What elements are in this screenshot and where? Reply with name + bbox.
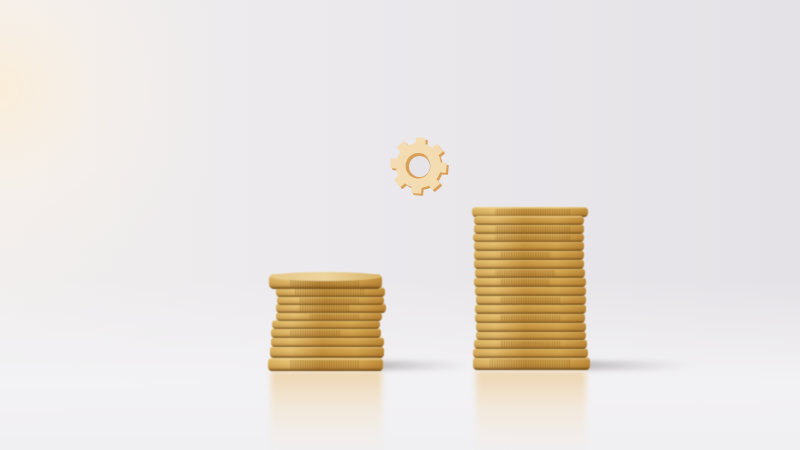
- shadow: right stack: [586, 361, 691, 370]
- shadow: left stack: [380, 361, 470, 370]
- top coin: right stack: [472, 207, 588, 225]
- reflection: right stack: [476, 371, 586, 450]
- reflection: left stack: [271, 371, 382, 450]
- left coin stack: [268, 272, 386, 371]
- gear icon: [390, 137, 449, 196]
- top coin: left stack: [269, 272, 382, 289]
- right coin stack: [472, 207, 590, 370]
